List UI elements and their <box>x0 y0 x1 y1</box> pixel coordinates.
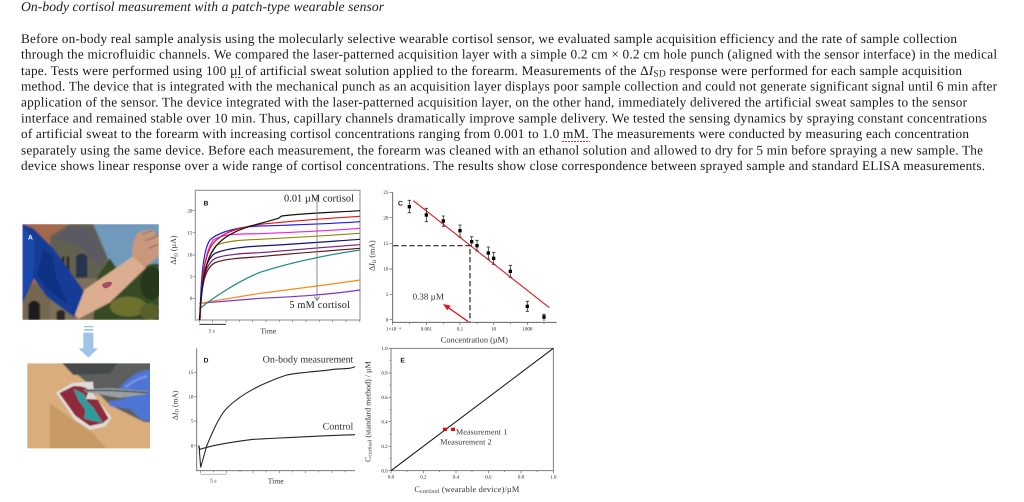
panel D: on-body measurement vs control <box>171 348 355 485</box>
x axis tick labels <box>386 326 532 332</box>
y axis tick labels: 25 <box>383 190 388 195</box>
text block: body paragraph: tape. Tests were performed using 100 µl of artificial sweat solution applied to the forearm. Measurements of the ΔI <box>21 63 653 78</box>
y axis tick labels: 15 <box>187 230 192 236</box>
x axis tick labels: 0.1 <box>457 326 463 332</box>
y axis tick labels: 5 <box>191 419 193 424</box>
label: control: Control <box>323 421 353 432</box>
concentration arrow <box>314 195 320 301</box>
sensor patch on arm <box>102 282 112 288</box>
text block: body paragraph: of artificial sweat to the forearm with increasing cortisol concentrations ranging from 0.001 to 1.0 mM. The measurements were conducted by measuring each concentration <box>21 126 969 141</box>
y axis tick labels: 5 <box>190 274 192 280</box>
text block: body paragraph: method. The device that is integrated with the mechanical punch as an acquisition layer displays poor sample collection and could not generate significant signal until 6 min after <box>21 78 998 94</box>
label: 0.01 µM cortisol: 0.01 µM cortisol <box>284 192 354 204</box>
y axis title: (standard method) / µM <box>364 361 373 440</box>
patch red lobes <box>60 387 108 425</box>
y axis tick labels: 20 <box>187 208 192 214</box>
x axis title: (wearable device)/µM <box>440 485 519 494</box>
y axis tick labels: 0.0 <box>381 468 388 474</box>
label A: A <box>28 234 33 241</box>
y axis tick labels: 0 <box>191 443 193 449</box>
y axis title: ΔI <box>169 257 178 265</box>
sleeve <box>22 224 84 317</box>
y axis title: cortisol <box>367 440 373 457</box>
y axis tick labels: 10 <box>383 267 388 272</box>
label B: B <box>204 200 208 207</box>
y axis title: D <box>372 260 377 263</box>
label: 0.38 µM: 0.38 µM <box>413 291 444 301</box>
fit line <box>413 201 549 308</box>
y axis tick labels: 0 <box>190 296 192 301</box>
y axis tick labels: 15 <box>188 370 193 375</box>
y axis tick labels: 0 <box>386 317 388 323</box>
text block: body paragraph: application of the sensor. The device integrated with the laser-patterned acquisition layer, on the other hand, immediately delivered the artificial sweat samples to the sensor <box>21 94 968 110</box>
y axis title: (mA) <box>368 240 377 260</box>
label: on-body measurement: On-body measurement <box>263 354 354 365</box>
forearm skin <box>75 255 146 319</box>
text block: body paragraph: separately using the same device. Before each measurement, the forearm was cleaned with an ethanol solution and allowed to dry for 5 min before spraying a new sample. The <box>21 142 983 158</box>
y axis tick labels: 1.0 <box>381 346 388 351</box>
x axis title: Time <box>260 327 276 335</box>
label D: D <box>204 357 208 364</box>
scale bar <box>199 323 226 326</box>
y axis tick labels: 0.8 <box>381 371 388 376</box>
text block: body paragraph: device shows linear response over a wide range of cortisol concentrations. The results show close correspondence between sprayed sample and standard ELISA measurements. <box>21 158 985 173</box>
text block: body paragraph: through the microfluidic channels. We compared the laser-patterned acquisition layer with a simple 0.2 cm × 0.2 cm hole punch (aligned with the sensor interface) in the medical <box>21 46 997 62</box>
text block: body paragraph: interface and remained stable over 10 min. Thus, capillary channels dramatically improve sample delivery. We tested the sensing dynamics by spraying constant concentrations <box>21 110 987 126</box>
x axis tick labels: 1×10⁻⁴ <box>386 326 401 332</box>
data points with error bars <box>408 200 546 321</box>
x axis tick labels: 0.8 <box>518 475 524 480</box>
y axis tick labels: 0.6 <box>381 395 388 400</box>
scale bar <box>200 473 227 476</box>
photo B: sensor patch applied with tweezers <box>27 363 150 448</box>
y axis tick labels: 5 <box>386 292 388 297</box>
y axis tick labels <box>188 370 193 449</box>
y axis tick labels: 10 <box>187 253 192 258</box>
text block: body paragraph: SD <box>653 70 666 80</box>
response curves <box>199 211 360 320</box>
x axis tick labels: 1000 <box>522 326 532 332</box>
panel B: current response over time <box>169 190 360 335</box>
y axis tick labels <box>381 346 388 474</box>
x axis tick labels: 0.0 <box>388 475 394 480</box>
y axis title: (mA) <box>171 391 179 409</box>
scale label: 5 s <box>209 328 215 334</box>
x axis tick labels <box>388 475 556 480</box>
red arrow <box>447 307 468 322</box>
x axis title: C <box>414 485 420 494</box>
dashed guides <box>393 246 470 322</box>
text block: body paragraph: Before on-body real sample analysis using the molecularly selective wearable cortisol sensor, we evaluated sample acquisition efficiency and the rate of sample collection <box>21 31 957 46</box>
x axis tick labels: 10 <box>491 326 496 332</box>
patch backing <box>57 382 111 429</box>
y axis title: D <box>173 253 179 257</box>
measurement markers <box>443 428 455 431</box>
x axis title: Concentration (µM) <box>441 336 508 345</box>
x axis tick labels: 0.001 <box>421 326 432 332</box>
patch tree <box>73 389 103 423</box>
x axis title: cortisol <box>420 488 439 494</box>
x axis title: Time <box>268 477 284 485</box>
text block: body paragraph <box>21 31 998 173</box>
y axis title: ΔI <box>368 263 377 271</box>
y axis title: D <box>175 409 180 413</box>
label C: C <box>398 200 403 207</box>
text block: body paragraph: response were performed for each sample acquisition <box>666 63 962 78</box>
y axis tick labels: 0.4 <box>381 419 388 425</box>
glove <box>109 369 157 422</box>
identity line <box>391 348 553 471</box>
y axis tick labels <box>383 190 388 323</box>
x axis tick labels: 1.0 <box>550 475 556 480</box>
y axis tick labels: 15 <box>383 241 388 246</box>
photo A: arm with wearable sensor <box>22 224 163 320</box>
x axis tick labels: 0.4 <box>453 475 459 480</box>
label E: E <box>400 357 405 364</box>
label: measurement 1: Measurement 1 <box>456 428 507 437</box>
tweezers <box>84 388 148 398</box>
y axis title: (µA) <box>169 235 178 253</box>
panel E: wearable device vs standard method <box>364 346 556 494</box>
scale label: 5 s <box>210 478 217 484</box>
control curve <box>198 435 355 449</box>
arrow: down <box>79 326 98 358</box>
panel C: calibration curve <box>368 190 557 345</box>
x axis tick labels: 0.6 <box>485 475 492 480</box>
y axis tick labels: 10 <box>188 394 193 400</box>
y axis tick labels <box>187 208 192 301</box>
y axis tick labels: 20 <box>383 215 388 221</box>
label: measurement 2: Measurement 2 <box>440 438 492 446</box>
y axis title: C <box>364 457 373 462</box>
y axis tick labels: 0.2 <box>381 444 388 449</box>
on-body curve <box>199 367 355 467</box>
x axis tick labels: 0.2 <box>420 475 426 480</box>
y axis title: ΔI <box>171 413 179 420</box>
label: 5 mM cortisol: 5 mM cortisol <box>289 299 350 310</box>
